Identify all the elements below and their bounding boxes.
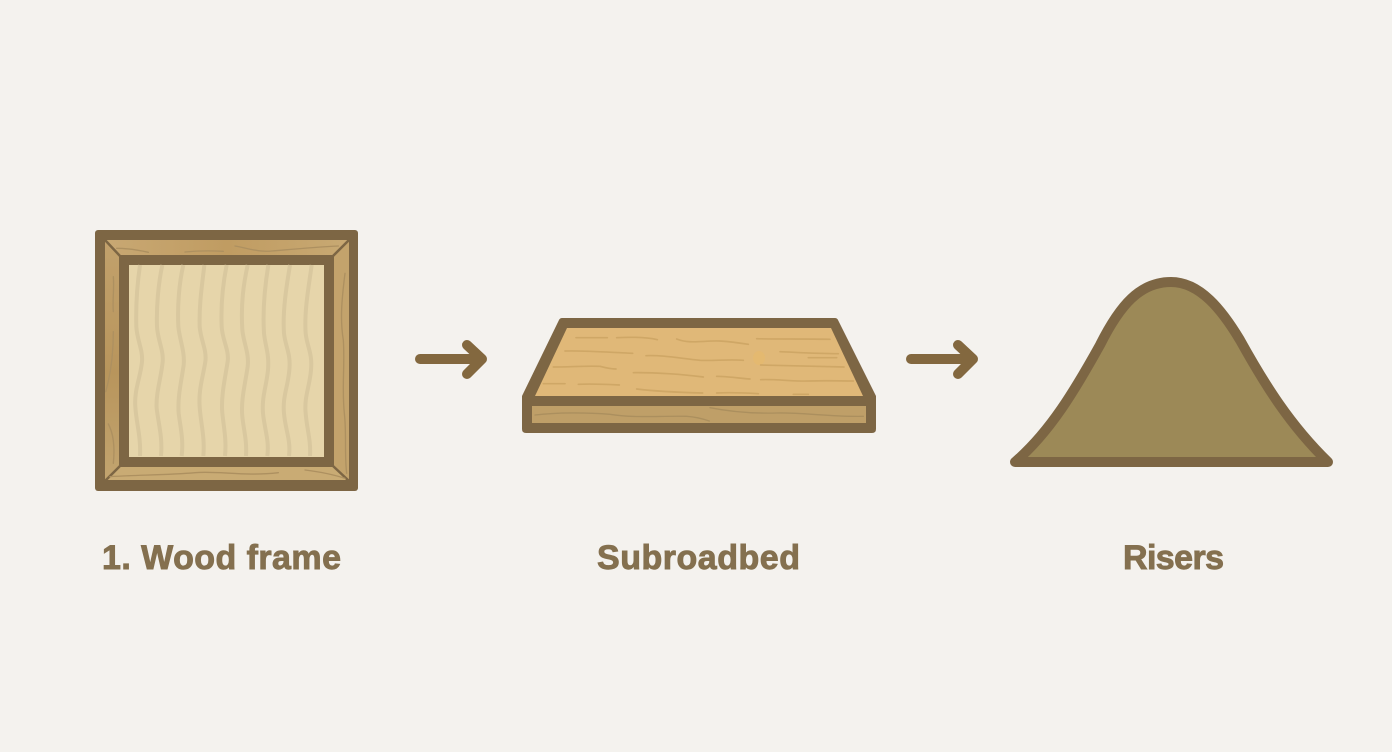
mitre joints bbox=[105, 240, 349, 481]
left board bbox=[105, 241, 119, 480]
step 3: risers icon bbox=[1015, 282, 1328, 462]
front edge grain bbox=[535, 408, 863, 421]
label: risers: Risers bbox=[1123, 539, 1224, 577]
frame board grain bbox=[106, 246, 347, 478]
panel wood grain bbox=[135, 265, 312, 456]
label: subroadbed: Subroadbed bbox=[597, 539, 800, 577]
bottom board bbox=[106, 467, 348, 480]
arrow 2 bbox=[911, 345, 973, 374]
board outline bbox=[522, 318, 876, 433]
label: wood frame: 1. Wood frame bbox=[102, 539, 341, 577]
frame outer border bbox=[95, 230, 358, 491]
inner panel bbox=[129, 265, 324, 457]
highlight spot bbox=[753, 351, 765, 365]
arrow 1 bbox=[420, 345, 482, 374]
right board bbox=[334, 241, 349, 480]
inner frame border bbox=[119, 255, 334, 467]
top board bbox=[106, 240, 348, 255]
step 1: wood frame icon bbox=[95, 230, 358, 491]
step 2: subroadbed icon bbox=[522, 318, 876, 433]
top face grain bbox=[543, 337, 853, 394]
board top face bbox=[535, 328, 863, 396]
board front edge bbox=[532, 406, 866, 423]
